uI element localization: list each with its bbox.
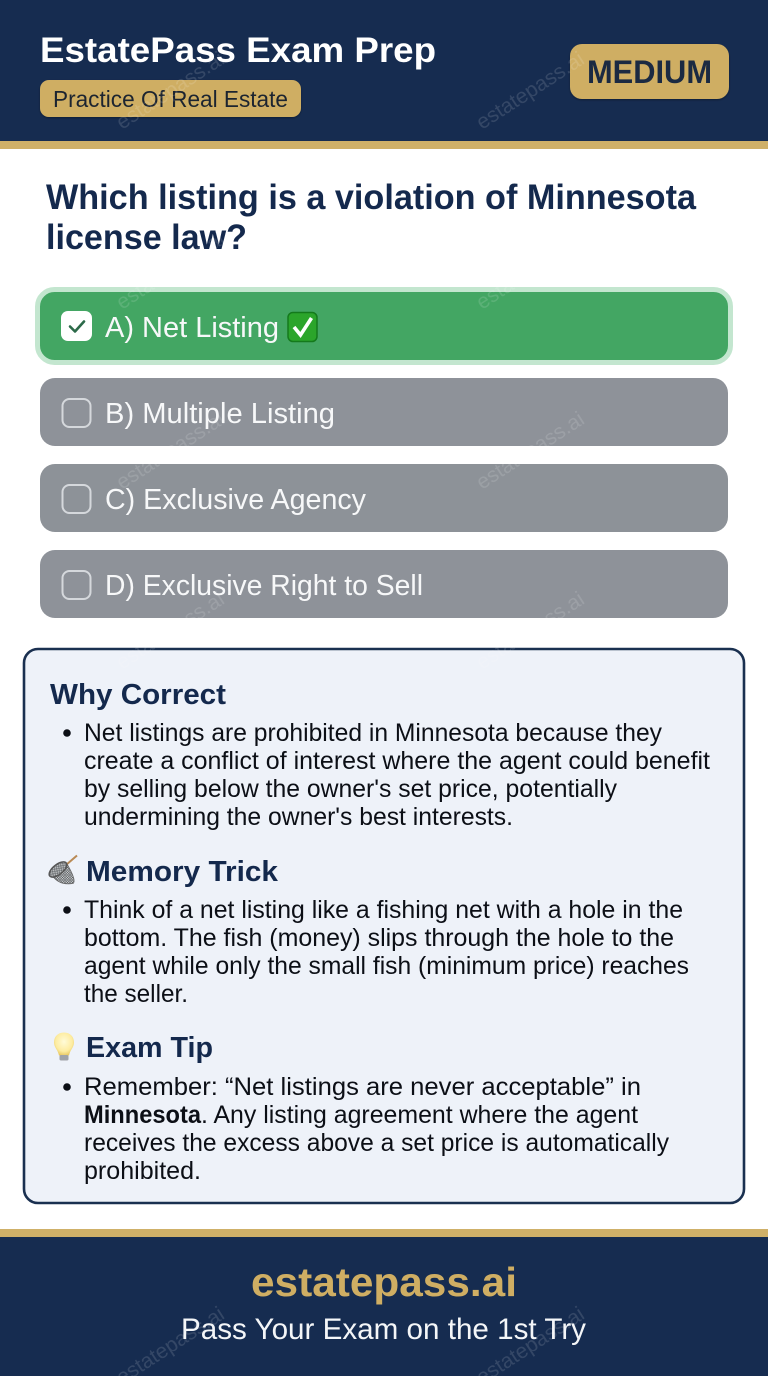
- exam tip text: [63, 1073, 669, 1185]
- option A correct: A) Net Listing: [105, 312, 279, 344]
- question heading: Which listing is a violation of Minnesota: [46, 178, 697, 217]
- watermarks: estatepass.ai: [472, 408, 589, 494]
- option B: B) Multiple Listing: [105, 398, 335, 430]
- watermarks: estatepass.ai: [112, 588, 229, 674]
- memory trick text: the seller.: [84, 980, 188, 1008]
- watermarks: estatepass.ai: [112, 408, 229, 494]
- icon: green check emoji: [288, 312, 317, 342]
- heading: memory trick: Memory Trick: [86, 856, 279, 888]
- icon: checked box: [61, 311, 92, 341]
- watermarks: [112, 48, 589, 1376]
- difficulty badge: [570, 44, 729, 99]
- heading: exam tip: Exam Tip: [86, 1032, 213, 1064]
- exam tip text: Remember: “Net listings are never acceptable” in: [84, 1073, 641, 1101]
- icon: light bulb: [54, 1032, 74, 1060]
- memory trick text: [63, 896, 689, 1008]
- option B: [40, 378, 728, 446]
- subject pill: Practice Of Real Estate: [53, 86, 288, 112]
- option C: [40, 464, 728, 532]
- exam tip text: . Any listing agreement where the agent: [201, 1101, 638, 1129]
- exam tip text: prohibited.: [84, 1157, 201, 1185]
- exam tip text: receives the excess above a set price is automatically: [84, 1129, 669, 1157]
- why correct text: create a conflict of interest where the agent could benefit: [84, 747, 710, 775]
- option D: [40, 550, 728, 618]
- difficulty badge: MEDIUM: [587, 54, 712, 90]
- heading: why correct: Why Correct: [50, 679, 226, 711]
- watermarks: estatepass.ai: [112, 228, 229, 314]
- footer band: [0, 1229, 768, 1376]
- memory trick text: Think of a net listing like a fishing net with a hole in the: [84, 896, 683, 924]
- option A correct: [38, 290, 730, 362]
- watermarks: estatepass.ai: [472, 48, 589, 134]
- memory trick text: agent while only the small fish (minimum price) reaches: [84, 952, 689, 980]
- watermarks: estatepass.ai: [112, 48, 229, 134]
- question heading: [46, 178, 697, 257]
- icon: fishing net: [47, 856, 77, 884]
- footer tagline: Pass Your Exam on the 1st Try: [181, 1313, 586, 1346]
- watermarks: estatepass.ai: [472, 228, 589, 314]
- why correct text: Net listings are prohibited in Minnesota because they: [84, 719, 662, 747]
- exam tip text: Minnesota: [84, 1101, 202, 1129]
- why correct text: [63, 719, 710, 831]
- subject pill: [40, 80, 301, 117]
- panel: explanation: [24, 649, 744, 1203]
- why correct text: undermining the owner's best interests.: [84, 803, 513, 831]
- footer brand: estatepass.ai: [251, 1259, 517, 1305]
- watermarks: estatepass.ai: [472, 588, 589, 674]
- option D: D) Exclusive Right to Sell: [105, 570, 423, 602]
- header band: [0, 0, 768, 149]
- option C: C) Exclusive Agency: [105, 484, 366, 516]
- memory trick text: bottom. The fish (money) slips through the hole to the: [84, 924, 674, 952]
- why correct text: by selling below the owner's set price, potentially: [84, 775, 617, 803]
- header title: EstatePass Exam Prep: [40, 31, 436, 70]
- question heading: license law?: [46, 218, 247, 257]
